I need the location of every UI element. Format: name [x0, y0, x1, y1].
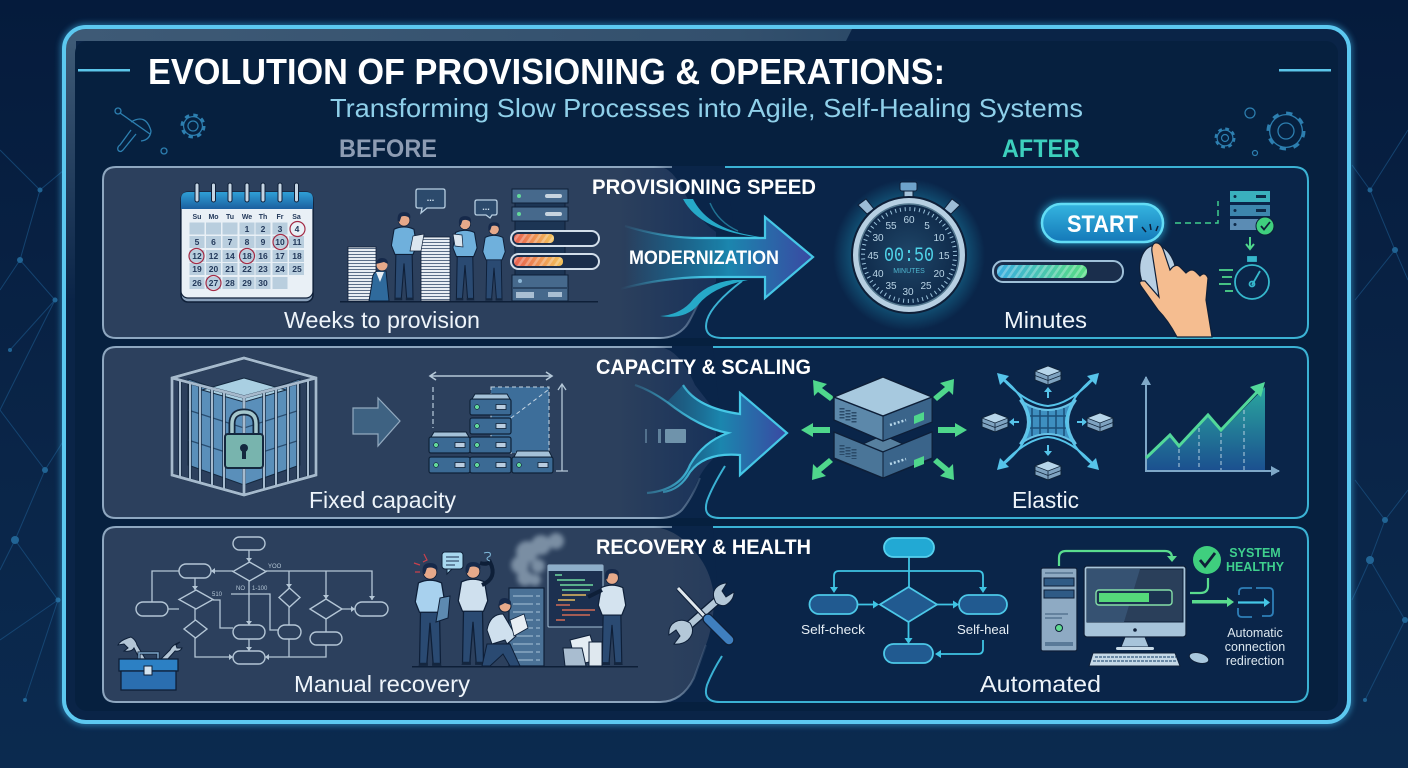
icon: scaling server stack: [801, 377, 967, 480]
label: manual recovery: Manual recovery: [294, 671, 471, 697]
engineer one: [415, 563, 445, 666]
icon: calendar: 21: [225, 264, 235, 274]
button: start: [1040, 202, 1165, 244]
engineer two: [458, 562, 488, 665]
arrow: green feedback: [1059, 551, 1208, 593]
icon: stopwatch: 40: [872, 269, 884, 280]
smoke: [511, 533, 564, 586]
before heading: BEFORE: [339, 135, 437, 163]
icon: fixed servers: [429, 372, 568, 473]
network decoration right: [1352, 130, 1408, 702]
icon: elastic mesh: [982, 366, 1113, 480]
icon: wrench and screwdriver: [669, 583, 734, 644]
subtitle: Transforming Slow Processes into Agile, Self-Healing Systems: [330, 93, 1083, 123]
label: minutes: Minutes: [1004, 307, 1087, 333]
illustration: engineers troubleshooting: [412, 533, 638, 668]
icon: calendar: 28: [225, 278, 235, 288]
pointing arm: [588, 590, 602, 597]
icon: calendar: 11: [292, 237, 302, 247]
clipboard: [436, 596, 450, 622]
label: elastic: Elastic: [1012, 487, 1079, 513]
person standing one: [391, 212, 417, 300]
person seated: [369, 258, 389, 301]
diagram: manual flowchart: NO: [236, 586, 245, 592]
icon: redirect: [1238, 588, 1273, 617]
icon: stopwatch: 10: [933, 233, 945, 244]
icon: calendar: 8: [245, 237, 250, 247]
icon: stopwatch: 25: [920, 281, 932, 292]
icon: stopwatch: 20: [933, 269, 945, 280]
person standing two: [453, 216, 477, 300]
icon: locked cage: [172, 358, 316, 495]
arrow: capacity step: [353, 398, 400, 446]
arrow: capacity swoosh: [635, 385, 787, 494]
icon: calendar: 7: [228, 237, 233, 247]
icon: desktop computer: [1041, 566, 1210, 666]
moving dashes: [645, 429, 686, 443]
label: automated: Automated: [980, 671, 1101, 697]
icon: small timer: [1219, 257, 1269, 299]
icon: calendar: 3: [278, 224, 283, 234]
stress marks: [414, 554, 427, 572]
icon: deco gears right: [1216, 108, 1303, 156]
person standing three: [483, 222, 505, 301]
icon: calendar: Tu: [226, 214, 234, 221]
icon: calendar: 29: [242, 278, 252, 288]
icon: stopwatch: 35: [885, 281, 897, 292]
icon: stopwatch: 60: [903, 215, 915, 226]
label: automatic connection redirection: [1225, 626, 1285, 668]
mini servers with check: [1175, 191, 1274, 249]
code screen: [548, 565, 603, 627]
chart: growth: [1141, 376, 1280, 476]
icon: calendar: 12: [192, 251, 202, 261]
loading bar one: [511, 231, 599, 246]
icon: stopwatch: 5: [924, 221, 930, 232]
panel: after speed: [706, 167, 1308, 338]
icon: hand on mouse: [1136, 242, 1212, 337]
server rack: [512, 189, 568, 301]
icon: calendar: 18: [292, 251, 302, 261]
icon: stopwatch: MINUTES: [893, 268, 925, 275]
diagram: manual flowchart: YOO: [268, 564, 282, 570]
icon: stopwatch: 45: [867, 251, 879, 262]
progress bar: [993, 261, 1123, 282]
diagram: automated flowchart: [801, 538, 1009, 663]
diagram: manual flowchart: 510: [212, 592, 223, 598]
panel: before capacity: [103, 347, 716, 518]
icon: calendar: 19: [192, 264, 202, 274]
icon: calendar: 17: [275, 251, 285, 261]
icon: calendar: 20: [209, 264, 218, 274]
arrow: green redirect: [1192, 597, 1234, 607]
label: system healthy: HEALTHY: [1226, 560, 1285, 574]
icon: calendar: 6: [211, 237, 216, 247]
icon: calendar: 9: [261, 237, 266, 247]
icon: stopwatch: 30: [902, 287, 914, 298]
header accent right: [1279, 69, 1331, 72]
icon: stopwatch: 15: [938, 251, 950, 262]
folder with documents: [563, 635, 602, 666]
label: modernization: MODERNIZATION: [629, 248, 779, 269]
icon: calendar: 14: [225, 251, 235, 261]
speech bubble two: [475, 200, 497, 218]
diagram: manual flowchart: [136, 537, 388, 664]
icon: calendar: 25: [292, 264, 302, 274]
icon: calendar: 22: [242, 264, 252, 274]
engineer kneeling: [482, 598, 528, 666]
icon: toolbox: [118, 637, 182, 690]
icon: calendar: [181, 183, 313, 302]
section title: recovery and health: RECOVERY & HEALTH: [596, 536, 811, 559]
diagram: automated flowchart: Self-check: [801, 622, 866, 637]
icon: calendar: Sa: [292, 214, 301, 221]
icon: stopwatch: 30: [872, 233, 884, 244]
chat bubble: [442, 552, 463, 574]
title: EVOLUTION OF PROVISIONING & OPERATIONS:: [148, 51, 945, 92]
arrow head: [1167, 556, 1177, 562]
panel: before speed: [103, 167, 716, 338]
speech bubble two: ...: [482, 202, 490, 212]
icon: stopwatch: [833, 179, 985, 331]
network decoration left: [0, 150, 64, 702]
padlock: [225, 412, 263, 468]
icon: calendar: 4: [295, 224, 300, 234]
icon: calendar: 10: [275, 237, 285, 247]
diagram: manual flowchart: 1-100: [252, 586, 268, 592]
icon: calendar: 12: [209, 251, 218, 261]
rack: [509, 588, 544, 666]
icon: stopwatch: 00:50: [884, 245, 934, 268]
label: automatic connection redirection: Automatic: [1227, 626, 1283, 640]
label: system healthy: SYSTEM: [1229, 546, 1281, 560]
panel: backing between columns: [650, 166, 750, 702]
icon: deco wrench left: [115, 108, 167, 154]
panel: after capacity: [706, 347, 1308, 518]
icon: calendar: 24: [275, 264, 285, 274]
document: [410, 234, 424, 251]
loading bar two: [511, 254, 599, 269]
label: weeks to provision: Weeks to provision: [284, 307, 480, 333]
icon: calendar: 23: [258, 264, 268, 274]
label: fixed capacity: Fixed capacity: [309, 487, 456, 513]
icon: healthy check: [1193, 546, 1221, 574]
icon: calendar: Mo: [208, 214, 219, 221]
panel: before recovery: [103, 527, 714, 702]
icon: stopwatch: 55: [885, 221, 897, 232]
icon: calendar: 2: [261, 224, 266, 234]
icon: calendar: 5: [195, 237, 200, 247]
icon: calendar: 16: [258, 251, 268, 261]
arrow: modernization swoosh: [620, 199, 813, 317]
engineer four: [598, 569, 626, 665]
icon: calendar: We: [242, 214, 252, 221]
speech bubble one: ...: [427, 193, 434, 203]
speech bubble one: [416, 189, 445, 213]
panel: after recovery: [706, 527, 1308, 702]
icon: calendar: Su: [193, 214, 201, 221]
document two: [453, 234, 463, 247]
button: start: START: [1067, 211, 1138, 238]
label: automatic connection redirection: connection: [1225, 640, 1285, 654]
icon: calendar: 26: [192, 278, 202, 288]
section title: provisioning speed: PROVISIONING SPEED: [592, 176, 816, 199]
icon: calendar: Th: [259, 214, 267, 221]
icon: calendar: Fr: [276, 214, 284, 221]
icon: deco gear left: [183, 116, 203, 136]
arm gesture: [480, 562, 493, 585]
icon: calendar: 27: [209, 278, 218, 288]
illustration: team with paper stacks: [340, 189, 599, 302]
icon: calendar: 30: [258, 278, 268, 288]
label: automatic connection redirection: redirection: [1226, 654, 1284, 668]
header accent left: [78, 69, 130, 72]
question scribble: [484, 552, 490, 561]
section title: capacity and scaling: CAPACITY & SCALING: [596, 356, 811, 379]
icon: calendar: 18: [242, 251, 252, 261]
after heading: AFTER: [1002, 135, 1080, 163]
diagram: automated flowchart: Self-heal: [957, 622, 1009, 637]
icon: calendar: 1: [245, 224, 250, 234]
label: system healthy: [1226, 546, 1285, 574]
